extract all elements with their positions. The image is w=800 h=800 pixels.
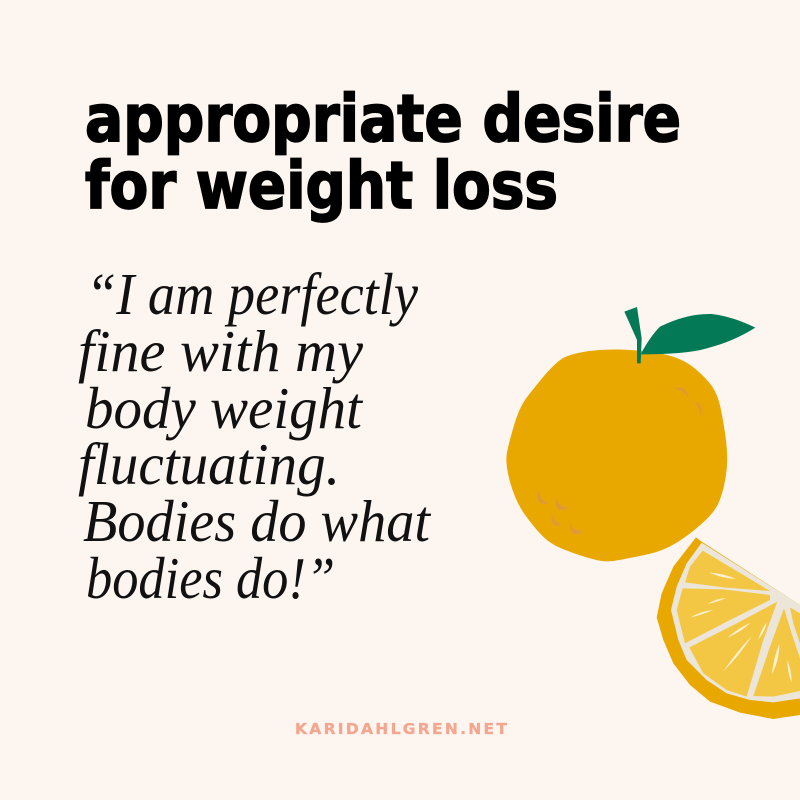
icon: orange with leaf <box>507 307 755 561</box>
quote text: Bodies do what <box>83 488 432 554</box>
quote text: bodies do!” <box>86 545 335 611</box>
quote text: fluctuating. <box>78 431 340 497</box>
orange body <box>507 350 726 561</box>
title: appropriate desire <box>85 82 681 157</box>
footer website: KARIDAHLGREN.NET <box>295 720 507 738</box>
quote text: body weight <box>85 375 364 441</box>
pith <box>671 543 800 702</box>
title: for weight loss <box>85 149 558 224</box>
stem <box>624 307 642 363</box>
quote text: fine with my <box>78 318 364 384</box>
rind <box>657 537 800 719</box>
segment highlights <box>690 573 792 683</box>
orange skin dimples <box>538 387 702 534</box>
segments <box>677 551 800 697</box>
quote text: “I am perfectly <box>86 261 419 327</box>
quote text <box>78 261 432 611</box>
title <box>85 82 681 224</box>
icon: orange slice <box>657 537 800 719</box>
leaf <box>641 314 755 354</box>
